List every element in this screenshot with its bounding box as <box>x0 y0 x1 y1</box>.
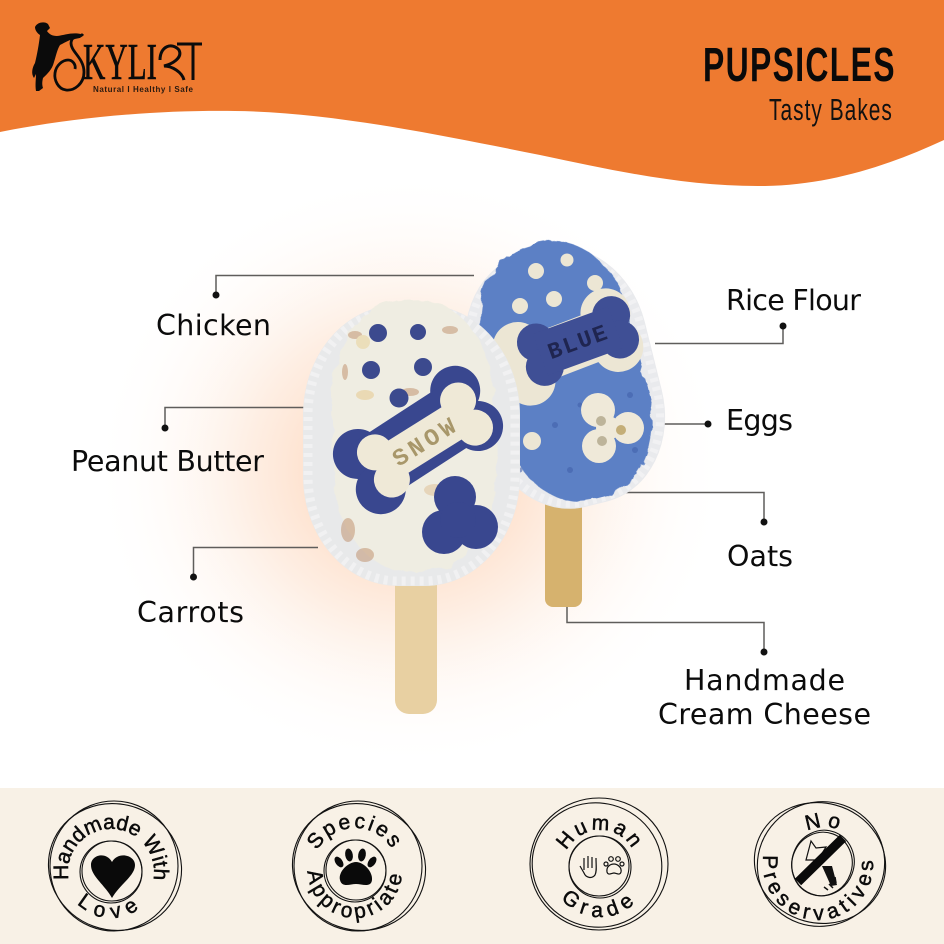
blue body <box>463 226 669 516</box>
logo tagline: Natural I Healthy I Safe <box>93 85 194 94</box>
title: PUPSICLES <box>703 37 896 92</box>
heart icon <box>91 855 135 898</box>
paper cup <box>445 230 685 526</box>
label: Eggs: Eggs <box>726 404 793 437</box>
label: Peanut Butter: Peanut Butter <box>71 445 264 478</box>
blue bone with name: BLUE <box>545 320 613 366</box>
label: Oats: Oats <box>727 540 793 573</box>
body flecks <box>341 326 458 562</box>
crossed-out dropper icon <box>798 838 843 890</box>
popsicle: Snow <box>303 297 520 714</box>
leader lines <box>162 276 786 656</box>
badge: Human Grade: Grade <box>564 891 633 918</box>
label: Carrots: Carrots <box>137 596 244 629</box>
navy bone <box>323 356 513 524</box>
small paw icon <box>604 857 624 874</box>
logo dog silhouette <box>32 22 81 91</box>
navy paw <box>422 476 498 554</box>
cream paw <box>581 393 644 463</box>
background glow <box>0 100 944 790</box>
stick <box>545 470 582 607</box>
popsicle: Blue <box>445 226 685 607</box>
label: Rice Flour: Rice Flour <box>726 284 861 317</box>
cream bone with name <box>350 376 500 504</box>
blue body specks <box>507 327 638 473</box>
badge: No Preservatives: Preservatives <box>762 856 874 920</box>
blue bone with name <box>512 291 644 391</box>
hand icon <box>580 856 596 877</box>
badge: Human Grade <box>529 798 669 930</box>
header orange wave <box>0 0 944 186</box>
cream dots <box>512 254 603 450</box>
paw icon <box>333 848 378 885</box>
cream bone <box>485 281 651 413</box>
logo stylised final letters <box>160 44 202 80</box>
badge: Species Appropriate <box>292 800 426 932</box>
paper cup <box>303 305 520 586</box>
badge: Handmade With Love <box>48 800 182 932</box>
label: Chicken: Chicken <box>156 309 271 342</box>
logo S flourish <box>55 34 84 90</box>
footer band <box>0 788 944 944</box>
label: Handmade Cream Cheese: Cream Cheese <box>658 698 871 731</box>
logo <box>32 22 202 94</box>
badge: Species Appropriate: Species <box>308 815 400 848</box>
badge: No Preservatives: No <box>804 812 840 830</box>
subtitle: Tasty Bakes <box>769 92 893 127</box>
badge: Human Grade: Human <box>555 818 640 850</box>
logo wordmark: KYLI <box>83 34 157 91</box>
stick <box>395 560 437 714</box>
badge: No Preservatives <box>754 801 886 927</box>
label: Handmade Cream Cheese <box>658 664 871 731</box>
badge: Handmade With Love: Handmade With <box>53 816 170 880</box>
white body <box>328 297 500 575</box>
navy dots <box>362 324 432 408</box>
label: Handmade Cream Cheese: Handmade <box>684 664 845 697</box>
badge: Species Appropriate: Appropriate <box>306 871 402 923</box>
cream bone with name: SNOW <box>388 412 465 474</box>
badge: Handmade With Love: Love <box>78 892 138 918</box>
